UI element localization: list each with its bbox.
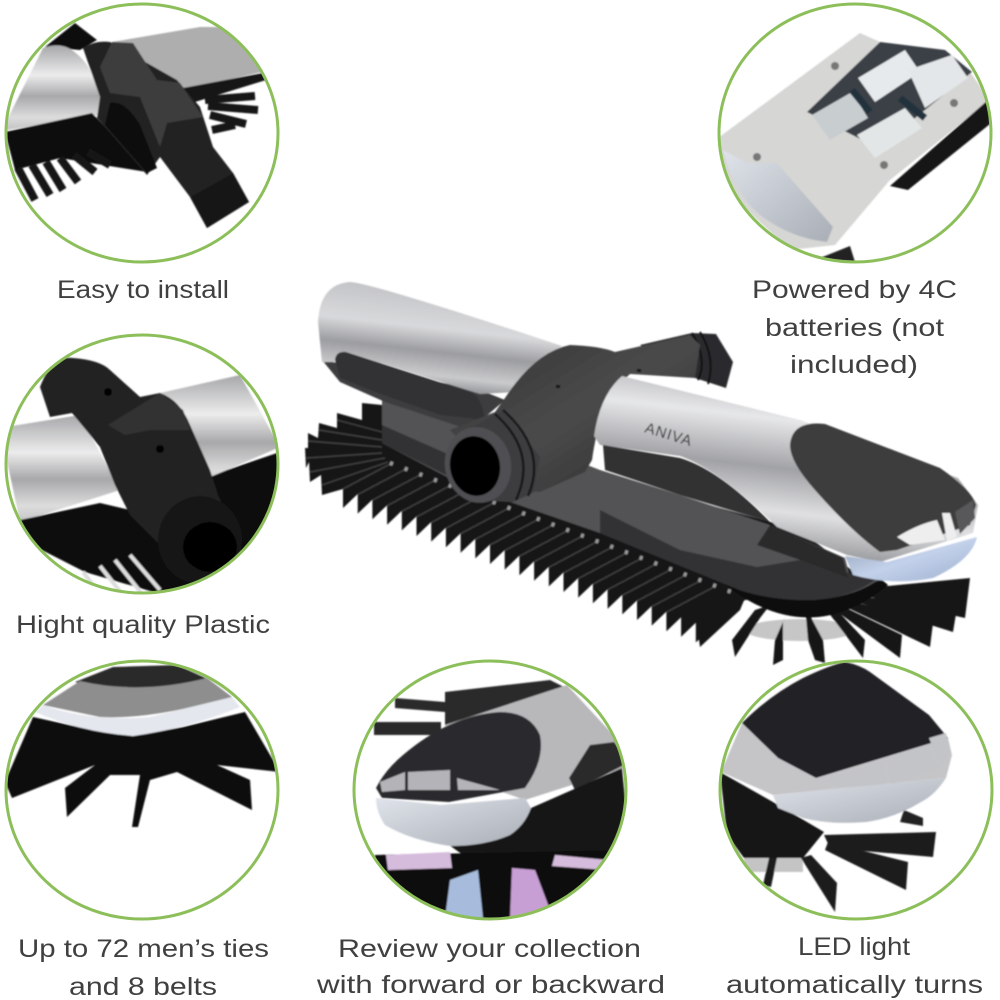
caption: Powered by 4C	[752, 276, 957, 304]
under left tube	[322, 360, 505, 430]
green ring	[719, 4, 991, 262]
right fan blades	[697, 578, 970, 665]
detail image	[0, 358, 280, 600]
tooth highlights	[306, 420, 713, 612]
caption: automatically turns	[726, 971, 983, 999]
panel: batteries	[718, 4, 991, 379]
batteries	[858, 50, 920, 102]
hub holes	[556, 369, 641, 388]
right dark window	[603, 445, 770, 522]
green ring	[6, 4, 278, 262]
panel: ties and belts capacity	[5, 661, 280, 1000]
green ring	[6, 335, 278, 593]
base plate skirt	[382, 425, 875, 600]
front nozzle barrel	[470, 410, 540, 502]
hub strap and body	[450, 335, 700, 492]
main product: tie rack	[305, 282, 978, 665]
detail image	[5, 23, 266, 228]
panel: high quality plastic	[0, 335, 280, 639]
left dark window	[335, 352, 485, 420]
right silver tube	[594, 376, 978, 562]
black top pad	[790, 423, 976, 552]
caption: with forward or backward	[316, 971, 665, 999]
green ring	[720, 661, 992, 919]
tooth rivets	[390, 463, 742, 596]
left silver tube	[318, 282, 562, 394]
panel: LED light	[720, 661, 992, 999]
panel: easy to install	[5, 4, 278, 304]
panel: review collection	[316, 661, 665, 999]
detail image	[720, 662, 952, 912]
caption: Review your collection	[338, 935, 641, 963]
caption: Hight quality Plastic	[16, 611, 270, 639]
rear nozzle	[640, 333, 733, 388]
LED light	[845, 537, 977, 581]
fan hub	[725, 575, 888, 618]
caption: Easy to install	[57, 276, 229, 304]
comb teeth band	[305, 403, 880, 642]
nozzle rim	[438, 421, 518, 509]
brand logo: ANIVA	[643, 420, 695, 450]
nozzle grooves	[495, 410, 534, 500]
rear nozzle ring lines	[692, 332, 711, 384]
detail image	[718, 33, 990, 262]
control buttons	[897, 513, 957, 545]
green ring	[354, 661, 626, 919]
base plate	[382, 400, 880, 600]
green ring	[6, 661, 278, 919]
caption: included)	[790, 351, 918, 379]
caption: LED light	[798, 933, 910, 961]
gray disc under right fan	[745, 619, 855, 641]
power button	[955, 500, 975, 534]
detail image	[370, 680, 630, 925]
nozzle opening	[445, 432, 505, 500]
caption: Up to 72 men’s ties	[18, 935, 269, 963]
skirt under tube	[757, 525, 848, 578]
caption: batteries (not	[765, 314, 944, 342]
detail image	[5, 665, 280, 827]
